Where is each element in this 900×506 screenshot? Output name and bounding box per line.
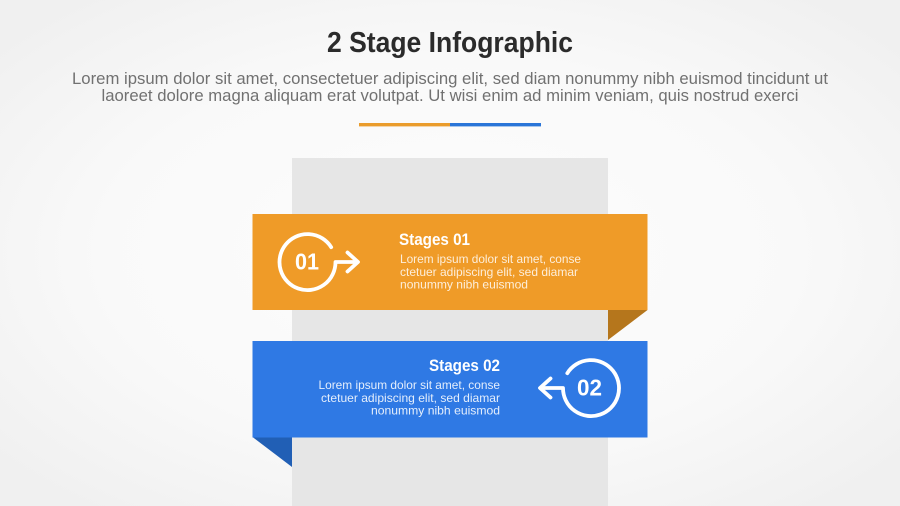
blue ribbon band <box>252 341 648 438</box>
orange ribbon band <box>252 214 648 310</box>
stage 02 body text: nonummy nibh euismod <box>371 404 500 418</box>
stage 02 body text: Lorem ipsum dolor sit amet, conse <box>318 378 500 392</box>
title underline <box>359 123 541 126</box>
subtitle text block: Lorem ipsum dolor sit amet, consectetuer adipiscing elit, sed diam nonummy nibh euismod tincidunt ut <box>72 70 828 88</box>
orange ribbon fold <box>608 310 648 340</box>
panel: stage 01 ribbon <box>252 214 648 340</box>
stage 02 body text: ctetuer adipiscing elit, sed diamar <box>321 391 500 405</box>
subtitle text block: laoreet dolore magna aliquam erat volutpat. Ut wisi enim ad minim veniam, quis nostrud exerci <box>102 87 799 105</box>
icon: stage 01 circular arrow <box>280 234 358 290</box>
stage 02 heading: Stages 02 <box>429 356 500 375</box>
stage 01 body text <box>400 252 581 292</box>
stage 02 body text <box>318 378 500 418</box>
stage 01 body text: Lorem ipsum dolor sit amet, conse <box>400 252 581 266</box>
stage 01 number: 01 <box>295 248 319 274</box>
stage 02 number: 02 <box>577 374 602 400</box>
grey background column <box>292 158 608 506</box>
title: 2 Stage Infographic <box>327 27 573 59</box>
stage 01 body text: ctetuer adipiscing elit, sed diamar <box>400 265 578 279</box>
subtitle text block <box>72 70 828 105</box>
icon: stage 02 circular arrow <box>540 360 619 416</box>
stage 01 heading: Stages 01 <box>399 230 470 249</box>
panel: stage 02 ribbon <box>252 341 648 467</box>
stage 01 body text: nonummy nibh euismod <box>400 278 528 292</box>
blue ribbon fold <box>252 437 292 467</box>
